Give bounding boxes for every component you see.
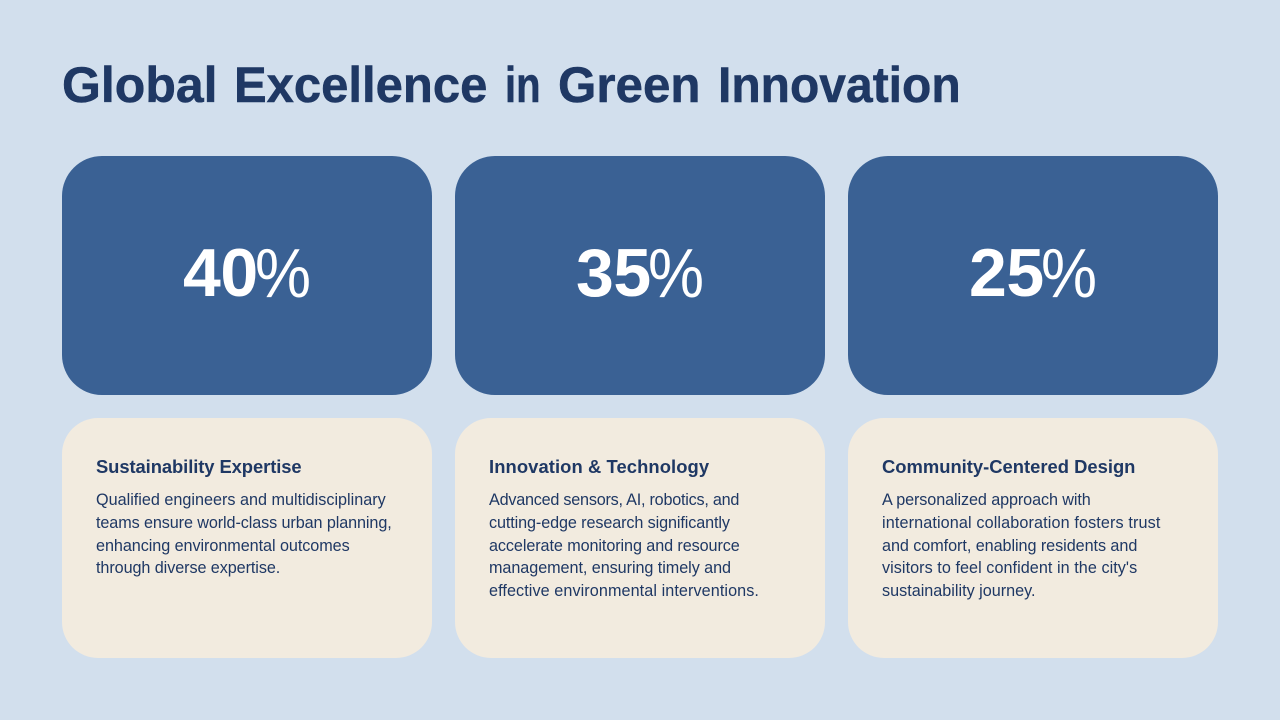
- text: sustainability description: teams ensure world-class urban planning,: [96, 514, 392, 532]
- number: 35%: 35: [576, 235, 651, 311]
- panel: innovation and technology: [455, 418, 825, 658]
- text: innovation description: accelerate monitoring and resource: [489, 537, 740, 555]
- text: innovation description: Advanced sensors, AI, robotics, and: [489, 491, 739, 509]
- text: innovation description: cutting-edge research significantly: [489, 514, 730, 532]
- text: community description: A personalized approach with: [882, 491, 1091, 509]
- number: 25%: [969, 234, 1097, 312]
- text: community description: international collaboration fosters trust: [882, 514, 1160, 532]
- number: 40%: 40: [183, 235, 258, 311]
- number: 35%: %: [648, 234, 704, 312]
- text: innovation description: [489, 491, 759, 600]
- text: innovation description: effective environmental interventions.: [489, 582, 759, 600]
- number: 40%: %: [255, 234, 311, 312]
- panel: 25% stat: [848, 156, 1218, 395]
- text: sustainability description: [96, 491, 392, 577]
- number: 35%: [576, 234, 704, 312]
- text: sustainability description: enhancing environmental outcomes: [96, 537, 350, 555]
- panel: community-centered design: [848, 418, 1218, 658]
- title: Green: [558, 57, 700, 113]
- text: community description: sustainability journey.: [882, 582, 1036, 600]
- title: Global: [62, 57, 218, 113]
- number: 25%: %: [1041, 234, 1097, 312]
- title: Innovation: [718, 57, 960, 113]
- heading: sustainability expertise: Sustainability Expertise: [96, 456, 302, 476]
- title: Excellence: [234, 57, 487, 113]
- panel: 35% stat: [455, 156, 825, 395]
- title: [62, 57, 960, 113]
- text: sustainability description: Qualified engineers and multidisciplinary: [96, 491, 386, 509]
- title: in: [504, 57, 540, 113]
- panel: 40% stat: [62, 156, 432, 395]
- heading: innovation and technology: Innovation & Technology: [489, 456, 709, 476]
- panel: sustainability expertise: [62, 418, 432, 658]
- heading: community-centered design: Community-Centered Design: [882, 456, 1135, 476]
- number: 40%: [183, 234, 311, 312]
- number: 25%: 25: [969, 235, 1044, 311]
- text: community description: [882, 491, 1160, 600]
- text: innovation description: management, ensuring timely and: [489, 559, 731, 577]
- text: sustainability description: through diverse expertise.: [96, 559, 280, 577]
- text: community description: visitors to feel confident in the city's: [882, 559, 1137, 577]
- text: community description: and comfort, enabling residents and: [882, 537, 1137, 555]
